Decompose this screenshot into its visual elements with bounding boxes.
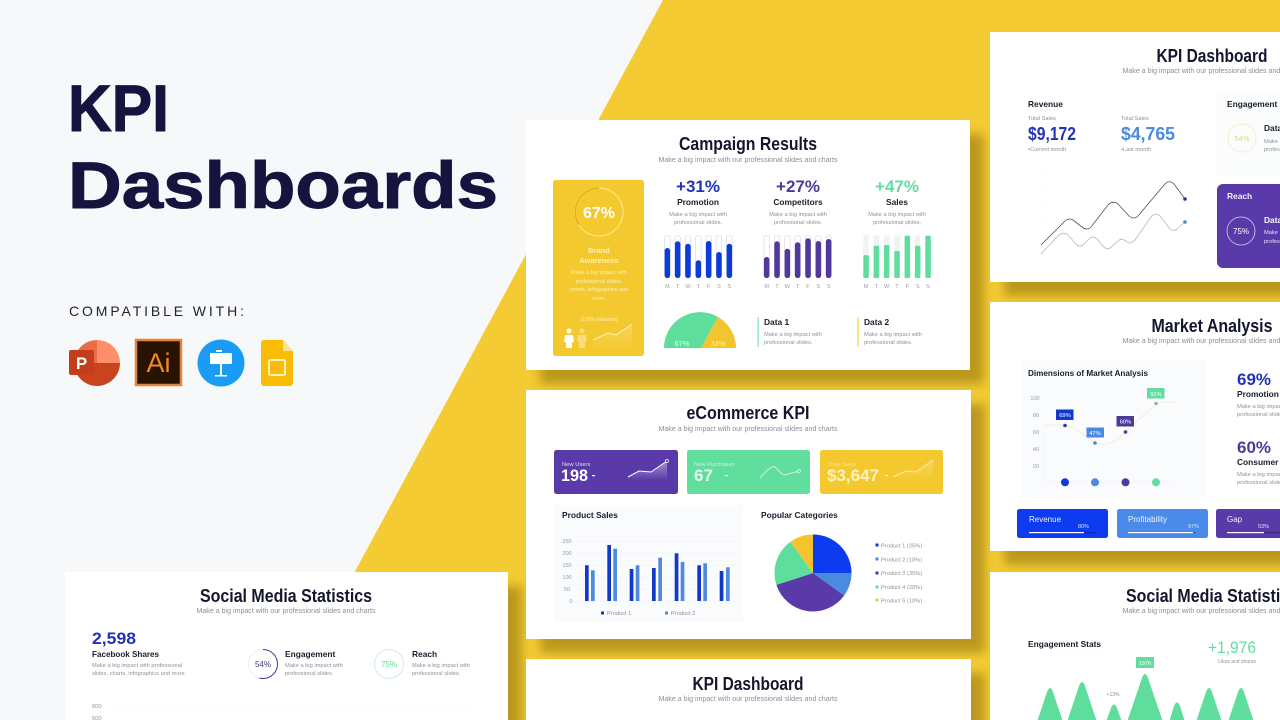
stat: Facebook shares [92, 629, 187, 677]
chart: dimensions of market analysis: 47% [1089, 431, 1101, 437]
bar chart: promotion: T [676, 284, 680, 290]
panel: social media statistics, left [65, 572, 508, 720]
stat: promotion: Promotion [1237, 389, 1279, 399]
area chart: engagement peaks: 1976 [1139, 661, 1151, 667]
stat: engagement ring: Engagement [285, 649, 335, 659]
pie chart: popular categories: Product 3 (35%) [881, 571, 922, 577]
stat: revenue: •Current month [1028, 147, 1066, 153]
stat: Facebook shares: Facebook Shares [92, 649, 159, 659]
bar chart: promotion: S [727, 284, 731, 290]
callout: data 1: professional slides. [764, 340, 813, 346]
stat: Facebook shares: 2,598 [92, 629, 136, 648]
panel: engagement [1217, 93, 1280, 177]
panel: reach: 75% [1233, 227, 1249, 236]
icon: Illustrator [136, 340, 181, 385]
area chart: engagement peaks [1037, 657, 1254, 720]
chart axis [92, 704, 478, 720]
bar chart: competitors: M [764, 284, 769, 290]
heading: eCommerce KPI [686, 403, 810, 423]
subtitle: Make a big impact with our professional slides and charts [658, 155, 838, 164]
card: new purchases: New Purchases [694, 462, 735, 468]
stat: reach ring: 75% [381, 660, 397, 669]
stat: promotion: Promotion [677, 197, 719, 207]
subtitle: Make a big impact with our professional slides and charts [658, 694, 838, 703]
card: brand awareness: (100% followers) [580, 317, 618, 323]
stat: likes and shares: Likes and shares [1218, 659, 1256, 665]
stat: promotion: +31% [676, 177, 720, 196]
stat: revenue: Total Sales [1028, 116, 1056, 122]
callout: data 1 [758, 317, 822, 347]
bar chart: sales: M [864, 284, 869, 290]
chart: dimensions of market analysis: 80 [1033, 413, 1039, 419]
panel: reach: Reach [1227, 191, 1252, 201]
panel: social media statistics, right [990, 572, 1280, 720]
stat: revenue: •Last month [1121, 147, 1151, 153]
stat: consumer [1237, 438, 1280, 486]
icon: PowerPoint [69, 340, 120, 386]
stat: likes and shares: +1,976 [1208, 638, 1256, 657]
bar chart: sales: T [895, 284, 899, 290]
callout: data 1: Data 1 [764, 317, 789, 327]
bar chart: promotion: W [685, 284, 691, 290]
card: gap: Gap [1227, 515, 1243, 524]
stat: likes and shares [1208, 638, 1256, 665]
stat: consumer: 60% [1237, 438, 1271, 457]
half pie chart: 33% [710, 339, 726, 348]
callout: data 2: professional slides. [864, 340, 913, 346]
bar chart: product sales: Product 2 [671, 611, 695, 617]
card: gap [1216, 509, 1280, 538]
pie chart: popular categories: Product 4 (20%) [881, 585, 922, 591]
subtitle: Make a big impact with our professional slides and charts [196, 606, 376, 615]
card: new purchases: 67 [694, 466, 713, 485]
card: brand awareness: Awareness [579, 256, 619, 265]
half pie chart [664, 312, 736, 348]
stat: engagement ring [248, 649, 343, 678]
bar chart: promotion: M [665, 284, 670, 290]
panel: engagement: Make [1264, 139, 1278, 145]
area chart: engagement peaks: +13% [1107, 692, 1120, 698]
callout: data 1: Make a big impact with [764, 332, 822, 338]
chart: dimensions of market analysis: 100 [1030, 396, 1040, 402]
stat: reach ring: professional slides. [412, 671, 461, 677]
panel: reach: Make [1264, 230, 1278, 236]
sparkline [593, 324, 632, 349]
stat: Facebook shares: Make a big impact with professional [92, 663, 182, 669]
callout: data 2: Make a big impact with [864, 332, 922, 338]
bar chart: promotion: T [697, 284, 701, 290]
icon: Illustrator: Ai [146, 348, 171, 378]
card: revenue: 80% [1078, 524, 1089, 530]
stat: sales: professional slides. [873, 220, 922, 226]
panel: ecommerce KPI [526, 390, 971, 639]
panel: market analysis [990, 302, 1280, 551]
card: new users: 198 [561, 466, 588, 485]
stat: promotion: Make a big impact with [669, 212, 727, 218]
panel: KPI dashboard, top right [990, 32, 1280, 282]
icon: PowerPoint: P [76, 354, 87, 373]
card: brand awareness: charts, infographics and [570, 287, 628, 293]
bar chart: competitors: W [785, 284, 791, 290]
card: brand awareness: professional slides, [576, 279, 623, 285]
bar chart: product sales: 0 [569, 599, 573, 605]
stat: promotion [1237, 370, 1280, 418]
bar chart: competitors: F [806, 284, 810, 290]
bar chart: sales [863, 235, 931, 290]
bar chart: sales: S [916, 284, 920, 290]
stat: engagement ring: Make a big impact with [285, 663, 343, 669]
callout: data 2 [858, 317, 922, 347]
stat: competitors: Make a big impact with [769, 212, 827, 218]
title: KPI [68, 71, 169, 145]
stat: Facebook shares: slides, charts, infographics and more. [92, 671, 187, 677]
bar chart: competitors: S [816, 284, 820, 290]
stat: competitors: Competitors [773, 197, 823, 207]
bar chart: competitors: T [775, 284, 779, 290]
heading: Campaign Results [679, 134, 817, 154]
heading: KPI Dashboard [692, 674, 804, 694]
card: new users [554, 450, 678, 494]
chart: dimensions of market analysis [1022, 360, 1207, 497]
chart: dimensions of market analysis: Dimensions of Market Analysis [1028, 368, 1148, 378]
callout: data 2: Data 2 [864, 317, 889, 327]
stat: promotion [669, 177, 727, 226]
panel: campaign results [526, 120, 970, 370]
bar chart: competitors: S [827, 284, 831, 290]
stat: reach ring [374, 649, 470, 678]
heading: Social Media Statistics [200, 586, 372, 606]
yellow diagonal panel [275, 0, 1280, 720]
bar chart: sales: F [906, 284, 910, 290]
card: brand awareness: more. [592, 296, 606, 302]
pie chart: popular categories [761, 510, 922, 611]
card: brand awareness: Brand [588, 246, 610, 255]
line chart: revenue [1041, 168, 1198, 256]
stat: revenue: $9,172 [1028, 124, 1076, 144]
card: new users: New Users [562, 462, 590, 468]
subtitle: Make a big impact with our professional slides and charts [658, 424, 838, 433]
card: gap: 53% [1258, 524, 1269, 530]
card: total sales: $3,647 [827, 466, 879, 485]
stat: competitors: professional slides. [774, 220, 823, 226]
card: total sales [820, 450, 943, 494]
stat: revenue: Revenue [1028, 99, 1063, 109]
bar chart: sales: W [884, 284, 890, 290]
icon: Google Slides [261, 340, 293, 386]
chart: dimensions of market analysis: 91% [1150, 392, 1162, 398]
bar chart: product sales: 100 [562, 575, 572, 581]
bar chart: product sales: Product 1 [607, 611, 631, 617]
stat: sales: +47% [875, 177, 919, 196]
chart axis: 600 [92, 704, 102, 710]
pie chart: popular categories: Product 1 (25%) [881, 544, 922, 550]
bar chart: sales: S [926, 284, 930, 290]
bar chart: competitors [764, 235, 831, 290]
card: brand awareness: 67% [583, 205, 615, 222]
pie chart: popular categories: Product 2 (10%) [881, 558, 922, 564]
chart: dimensions of market analysis: 20 [1033, 464, 1039, 470]
stat: revenue: Total Sales [1121, 116, 1149, 122]
bar chart: product sales: 200 [562, 551, 572, 557]
panel: engagement: 54% [1234, 134, 1250, 143]
pie chart: popular categories: Product 5 (10%) [881, 598, 922, 604]
stat: promotion: professional slides. [674, 220, 723, 226]
stat: promotion: 69% [1237, 370, 1271, 389]
stat: consumer: Consumer [1237, 457, 1279, 467]
bar chart: promotion [665, 235, 732, 290]
pie chart: popular categories: Popular Categories [761, 510, 838, 520]
chart: dimensions of market analysis: 60 [1033, 430, 1039, 436]
card: brand awareness: Make a big impact with [571, 270, 627, 276]
bar chart: promotion: F [707, 284, 711, 290]
card: total sales: Total Sales [828, 462, 856, 468]
stat: revenue [1028, 99, 1175, 153]
card: brand awareness [553, 180, 644, 356]
stat: revenue: $4,765 [1121, 124, 1175, 144]
chart: dimensions of market analysis: 69% [1059, 413, 1071, 419]
bar chart: product sales: 250 [562, 539, 572, 545]
bar chart: product sales [554, 505, 743, 622]
panel: KPI dashboard, bottom [526, 659, 971, 720]
bar chart: product sales: Product Sales [562, 510, 618, 520]
title [68, 71, 498, 222]
panel: reach [1217, 184, 1280, 268]
half pie chart: 67% [674, 339, 690, 348]
stat: sales [868, 177, 926, 226]
icon: Keynote [198, 340, 244, 386]
card: profitability: Profitability [1128, 515, 1167, 524]
stat: sales: Make a big impact with [868, 212, 926, 218]
chart: dimensions of market analysis: 40 [1033, 447, 1039, 453]
stat: sales: Sales [886, 197, 908, 207]
card: new purchases [687, 450, 810, 494]
panel: engagement: Engagement [1227, 99, 1277, 109]
card: profitability [1117, 509, 1208, 538]
bar chart: product sales: 50 [564, 587, 570, 593]
stat: competitors: +27% [776, 177, 820, 196]
title: Dashboards [68, 148, 498, 222]
stat: competitors [769, 177, 827, 226]
chart: dimensions of market analysis: 60% [1120, 420, 1131, 426]
icon: people [564, 328, 587, 348]
bar chart: promotion: S [717, 284, 721, 290]
label: engagement stats: Engagement Stats [1028, 639, 1101, 649]
card: revenue: Revenue [1029, 515, 1062, 524]
stat: engagement ring: professional slides. [285, 671, 334, 677]
bar chart: product sales: 150 [562, 563, 572, 569]
card: profitability: 97% [1188, 524, 1199, 530]
compatible with label: COMPATIBLE WITH: [69, 303, 244, 319]
stat: reach ring: Reach [412, 649, 437, 659]
stat: engagement ring: 54% [255, 660, 271, 669]
card: revenue [1017, 509, 1108, 538]
bar chart: competitors: T [796, 284, 800, 290]
stat: reach ring: Make a big impact with [412, 663, 470, 669]
bar chart: sales: T [875, 284, 879, 290]
